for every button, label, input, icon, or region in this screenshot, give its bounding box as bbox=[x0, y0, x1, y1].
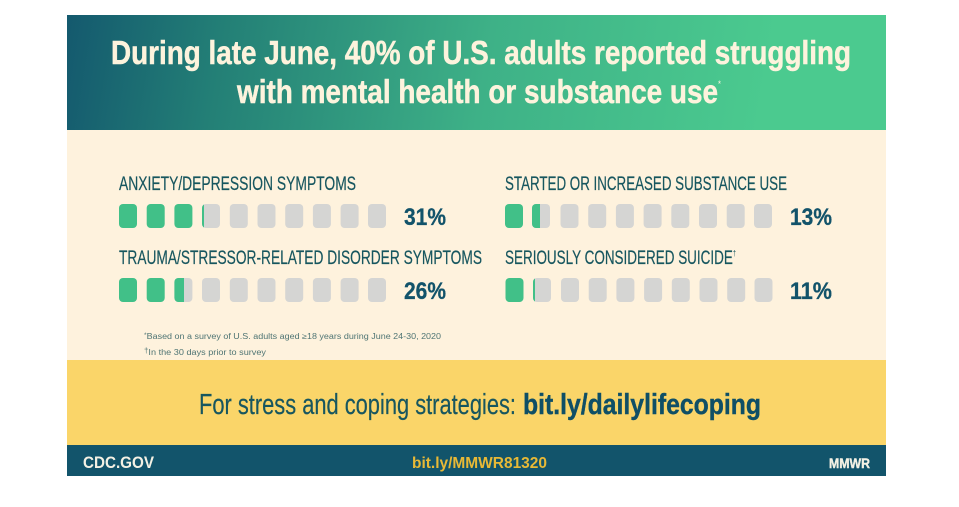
metric: suicide bbox=[505, 248, 832, 305]
label: † bbox=[733, 249, 736, 258]
footnotes bbox=[144, 332, 442, 357]
value: 13% bbox=[790, 204, 832, 231]
metric: substance use bbox=[505, 174, 832, 231]
tile row bbox=[505, 204, 772, 228]
tile row bbox=[119, 204, 386, 228]
footer link: bit.ly/MMWR81320 bbox=[412, 455, 547, 472]
MMWR: MMWR bbox=[829, 455, 870, 471]
value: 26% bbox=[404, 278, 446, 305]
label: TRAUMA/STRESSOR-RELATED DISORDER SYMPTOMS bbox=[119, 248, 482, 269]
infographic bbox=[67, 15, 886, 476]
label: SERIOUSLY CONSIDERED SUICIDE bbox=[505, 248, 826, 269]
value: 11% bbox=[790, 278, 832, 305]
tile row bbox=[119, 278, 386, 302]
yellow resource band bbox=[67, 360, 886, 445]
resource link: bit.ly/dailylifecoping bbox=[523, 389, 761, 421]
CDC.GOV: CDC.GOV bbox=[83, 453, 155, 472]
title: with mental health or substance use bbox=[237, 73, 805, 110]
cream content panel bbox=[67, 130, 886, 360]
footer bar bbox=[67, 445, 886, 476]
label: ANXIETY/DEPRESSION SYMPTOMS bbox=[119, 174, 356, 195]
footnotes: Based on a survey of U.S. adults aged ≥18 years during June 24-30, 2020 bbox=[147, 332, 442, 341]
footnotes: * bbox=[144, 333, 147, 339]
header banner bbox=[67, 15, 886, 130]
metric: trauma/stressor bbox=[119, 248, 482, 305]
tile row bbox=[506, 278, 772, 302]
title: * bbox=[718, 79, 721, 89]
resource link: For stress and coping strategies: bbox=[199, 389, 516, 421]
footnotes: † bbox=[144, 348, 149, 355]
title bbox=[111, 34, 851, 110]
label: STARTED OR INCREASED SUBSTANCE USE bbox=[505, 174, 787, 195]
metric: anxiety/depression bbox=[119, 174, 446, 231]
footnotes: In the 30 days prior to survey bbox=[148, 348, 266, 357]
value: 31% bbox=[404, 204, 446, 231]
